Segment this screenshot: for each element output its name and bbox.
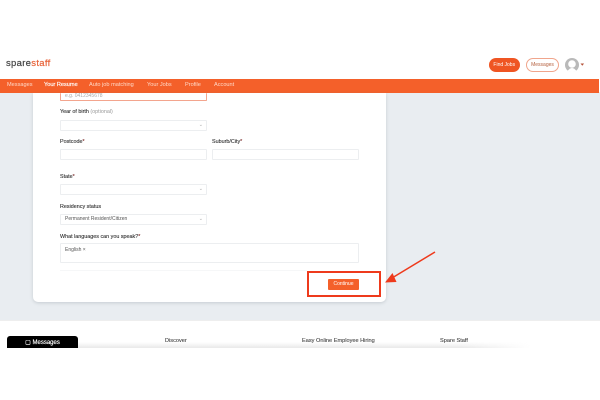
select: residency status: Permanent Resident/Citizen — [65, 216, 127, 222]
select: residency status — [60, 214, 207, 225]
messages button: Messages — [531, 62, 554, 68]
content background — [0, 92, 600, 320]
label: residency status: Residency status — [60, 204, 101, 210]
label: year of birth: Year of birth (optional) — [60, 109, 113, 115]
label: postcode: Postcode* — [60, 138, 85, 144]
arrow: pointing to continue — [385, 251, 436, 282]
callout: red highlight box — [307, 270, 381, 296]
header logo: sparestaff — [6, 58, 51, 69]
select: residency status: ⌄ — [199, 216, 203, 222]
select: state — [60, 184, 207, 195]
panel: form card — [33, 92, 386, 302]
nav: your jobs: Your Jobs — [147, 82, 172, 88]
select: year of birth — [60, 120, 207, 131]
nav: your resume: Your Resume — [44, 82, 78, 88]
nav: auto job matching: Auto job matching — [89, 82, 134, 88]
messages tab: ▢ Messages — [25, 340, 60, 346]
footer heading: discover: Discover — [165, 338, 187, 344]
label: languages: What languages can you speak?* — [60, 234, 140, 240]
label: suburb/city: Suburb/City* — [212, 138, 242, 144]
label: state: State* — [60, 174, 75, 180]
messages button — [526, 58, 559, 72]
footer background — [0, 320, 600, 400]
select: state: ⌄ — [199, 186, 203, 192]
input: languages — [60, 243, 359, 262]
phone input: e.g. 0412345678 — [65, 92, 103, 98]
find jobs button — [489, 58, 520, 72]
footer heading: easy online employee hiring: Easy Online Employee Hiring — [302, 338, 375, 344]
nav: messages: Messages — [7, 82, 32, 88]
icon: user avatar — [565, 58, 584, 72]
select: year of birth: ⌄ — [199, 122, 203, 128]
messages tab — [7, 336, 78, 348]
input: languages: English × — [65, 247, 86, 253]
divider line — [60, 270, 307, 271]
find jobs button: Find Jobs — [493, 62, 515, 68]
input: postcode — [60, 149, 207, 160]
footer shadow band — [78, 344, 504, 348]
footer heading: spare staff: Spare Staff — [440, 338, 468, 344]
nav: profile: Profile — [185, 82, 201, 88]
continue button — [328, 279, 359, 290]
input: suburb/city — [212, 149, 359, 160]
continue button: Continue — [333, 281, 354, 287]
navigation bar — [0, 78, 599, 92]
phone input — [60, 92, 207, 100]
nav: account: Account — [214, 82, 234, 88]
